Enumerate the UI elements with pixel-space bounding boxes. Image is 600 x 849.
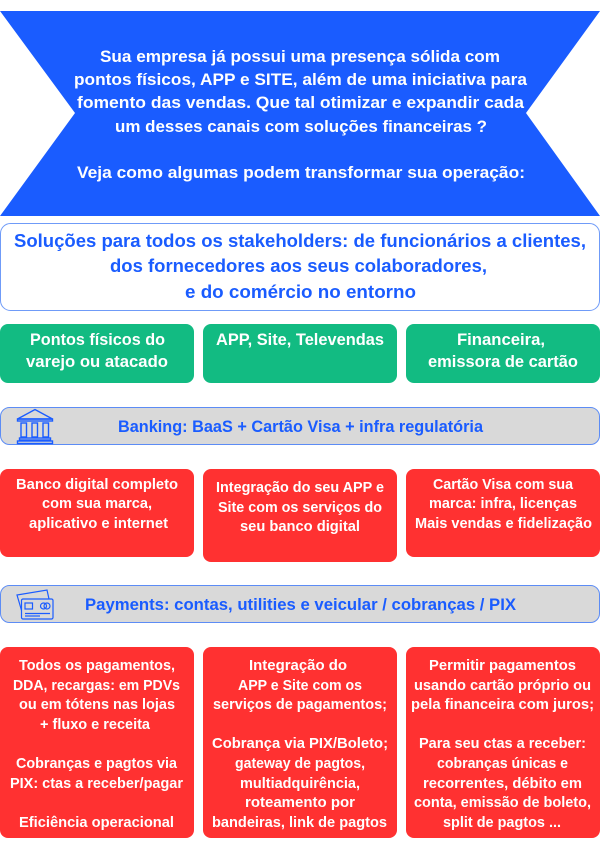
payments card: integração [203,647,397,838]
hero text [74,47,528,182]
stakeholders box [0,224,600,310]
banking card: banco digital: com sua marca, [42,495,152,512]
stakeholders text [14,230,586,302]
payments card: integração: roteamento por [245,794,355,811]
channel card: financeira: Financeira, [457,331,545,349]
hero text: um desses canais com soluções financeiras ? [115,117,487,136]
payments card: permitir pagamentos: Permitir pagamentos [429,657,576,674]
payments card: integração: serviços de pagamentos; [213,696,387,713]
banking card: cartão visa [406,469,600,557]
icon: credit cards [17,590,53,619]
icon: bank [18,410,52,444]
banking header bar [0,408,600,444]
payments card: integração: APP e Site com os [238,677,362,694]
payments card: integração: multiadquirência, [240,775,360,792]
channel card: financeira [406,324,600,383]
payments card: todos os pagamentos: PIX: ctas a receber/pagar [10,775,183,792]
banking card: integração [203,469,397,562]
channel card: pontos físicos: varejo ou atacado [26,353,168,371]
payments card: integração: bandeiras, link de pagtos [212,814,387,831]
payments card: integração: Cobrança via PIX/Boleto; [212,735,388,752]
payments card: todos os pagamentos: DDA, recargas: em PDVs [13,677,180,694]
payments card: permitir pagamentos: pela financeira com juros; [411,696,594,713]
hero banner [0,11,600,216]
hero text: Sua empresa já possui uma presença sólida com [100,47,500,66]
channel card: pontos físicos [0,324,194,383]
banking card: cartão visa: Cartão Visa com sua [433,476,574,493]
payments card: todos os pagamentos: Cobranças e pagtos via [16,755,178,772]
payments card: todos os pagamentos: + fluxo e receita [40,716,151,733]
payments card: integração: Integração do [249,657,347,674]
payments card: todos os pagamentos: ou em tótens nas lojas [19,696,175,713]
hero text: fomento das vendas. Que tal otimizar e expandir cada [77,93,525,112]
channel card: pontos físicos: Pontos físicos do [30,331,165,349]
channel card: financeira: emissora de cartão [428,353,578,371]
payments card: permitir pagamentos: Para seu ctas a receber: [419,735,586,752]
banking card: cartão visa: marca: infra, licenças [429,495,577,512]
channel card: app, site, televendas [203,324,397,383]
payments card: permitir pagamentos [406,647,600,838]
stakeholders text: e do comércio no entorno [185,281,416,302]
channel card: app, site, televendas: APP, Site, Televendas [216,331,384,349]
banking card: integração: Site com os serviços do [218,499,382,516]
hero text: Veja como algumas podem transformar sua operação: [77,163,525,182]
banking card: banco digital [0,469,194,557]
banking heading: Banking: BaaS + Cartão Visa + infra regulatória [118,417,484,436]
banking card: integração: seu banco digital [240,518,360,535]
banking card: cartão visa: Mais vendas e fidelização [415,515,592,532]
hero text: pontos físicos, APP e SITE, além de uma iniciativa para [74,70,528,89]
payments card: permitir pagamentos: recorrentes, débito em [423,775,582,792]
stakeholders text: Soluções para todos os stakeholders: de funcionários a clientes, [14,230,586,251]
stakeholders text: dos fornecedores aos seus colaboradores, [110,255,487,276]
banking card: banco digital: Banco digital completo [16,476,178,493]
banking card: banco digital: aplicativo e internet [29,515,168,532]
banking card: integração: Integração do seu APP e [216,479,384,496]
payments card: permitir pagamentos: conta, emissão de boleto, [414,794,591,811]
payments header bar [0,586,600,622]
payments card: integração: gateway de pagtos, [235,755,365,772]
payments card: permitir pagamentos: cobranças únicas e [437,755,568,772]
payments card: permitir pagamentos: usando cartão próprio ou [414,677,591,694]
stakeholders panel [0,224,600,310]
payments card: todos os pagamentos: Eficiência operacional [19,814,174,831]
payments card: todos os pagamentos: Todos os pagamentos, [19,657,175,674]
payments heading: Payments: contas, utilities e veicular / cobranças / PIX [85,595,517,614]
hero ribbon shape [0,11,600,216]
payments card: permitir pagamentos: split de pagtos ... [443,814,561,831]
payments card: todos os pagamentos [0,647,194,838]
